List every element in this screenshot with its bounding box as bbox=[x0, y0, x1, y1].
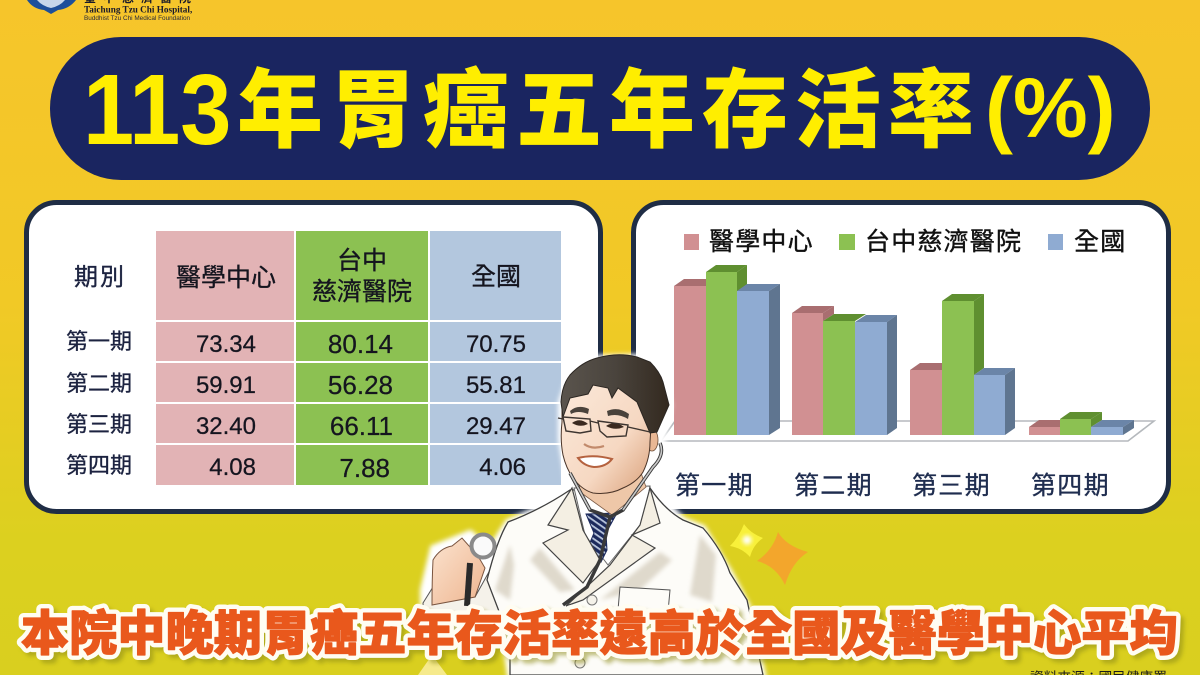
table column: 台中慈濟醫院: 66.11 bbox=[330, 411, 393, 441]
table row labels: 第二期 bbox=[66, 371, 132, 396]
doctor sleeve bbox=[423, 570, 512, 645]
chart legend: 醫學中心 bbox=[709, 228, 814, 256]
bars: 第一期 bbox=[674, 265, 780, 435]
title text: 年胃癌五年存活率 bbox=[237, 63, 981, 159]
bottom callout headline: 本院中晚期胃癌五年存活率遠高於全國及醫學中心平均 bbox=[21, 608, 1178, 661]
chart legend: 全國 bbox=[1074, 228, 1126, 256]
ear bbox=[646, 429, 658, 451]
table column: 全國 bbox=[430, 231, 561, 485]
mouth bbox=[578, 456, 612, 467]
bars: 第三期 bbox=[910, 294, 1015, 435]
panel: bar chart bbox=[634, 202, 1168, 512]
table row labels: 期別 bbox=[74, 264, 126, 291]
table column: 台中慈濟醫院: 慈濟醫院 bbox=[312, 278, 412, 306]
doctor coat bbox=[487, 488, 763, 675]
doctor white halo bbox=[423, 357, 763, 675]
hand bbox=[432, 538, 485, 605]
chart legend: 台中慈濟醫院 bbox=[865, 228, 1022, 256]
table column: 全國: 29.47 bbox=[466, 413, 526, 440]
table column: 醫學中心: 4.08 bbox=[209, 454, 256, 481]
panel: data table bbox=[26, 202, 600, 512]
chart category labels bbox=[675, 472, 1110, 500]
table column: 醫學中心: 73.34 bbox=[196, 331, 256, 358]
table column: 台中慈濟醫院: 80.14 bbox=[328, 329, 393, 359]
table column: 醫學中心: 醫學中心 bbox=[176, 264, 276, 292]
hospital logo: Buddhist Tzu Chi Medical Foundation bbox=[84, 15, 191, 22]
table column: 全國: 4.06 bbox=[479, 454, 526, 481]
table column: 台中慈濟醫院: 台中 bbox=[337, 247, 387, 275]
table column: 全國: 70.75 bbox=[466, 331, 526, 358]
chart category labels: 第四期 bbox=[1031, 472, 1110, 500]
right lapel bbox=[566, 488, 660, 606]
glasses bbox=[558, 417, 650, 437]
bottom callout headline: 本院中晚期胃癌五年存活率遠高於全國及醫學中心平均 bbox=[25, 612, 1182, 665]
coat button bbox=[587, 595, 597, 605]
neck bbox=[578, 470, 646, 515]
icon: orange sparkle bbox=[757, 532, 808, 585]
table column: 台中慈濟醫院 bbox=[296, 231, 428, 485]
stethoscope tubing bbox=[563, 443, 661, 605]
face bbox=[561, 382, 652, 493]
eyes bbox=[572, 420, 624, 429]
icon: yellow sparkle bbox=[730, 524, 763, 557]
table column: 醫學中心: 32.40 bbox=[196, 413, 256, 440]
hospital logo bbox=[27, 0, 198, 22]
necktie bbox=[586, 513, 617, 562]
chart category labels: 第二期 bbox=[794, 472, 873, 500]
table column: 台中慈濟醫院: 56.28 bbox=[328, 370, 393, 400]
table row labels: 第一期 bbox=[66, 329, 132, 354]
title banner bbox=[50, 37, 1150, 180]
shirt bbox=[574, 486, 650, 565]
bottom callout headline: 本院中晚期胃癌五年存活率遠高於全國及醫學中心平均 bbox=[21, 608, 1178, 661]
bars: 第二期 bbox=[792, 306, 897, 435]
coat shading bbox=[495, 535, 716, 602]
table column: 醫學中心 bbox=[156, 231, 294, 485]
table column: 台中慈濟醫院: 7.88 bbox=[339, 453, 390, 483]
table column: 全國: 55.81 bbox=[466, 372, 526, 399]
eyebrows bbox=[570, 407, 629, 419]
table row labels: 第四期 bbox=[66, 453, 132, 478]
table column: 醫學中心: 59.91 bbox=[196, 372, 256, 399]
table row labels bbox=[66, 264, 132, 478]
chart floor bbox=[661, 421, 1154, 441]
illustration: doctor bbox=[423, 355, 763, 675]
chart legend bbox=[684, 228, 1126, 256]
decorative star tip bbox=[418, 655, 447, 675]
title number: 113 bbox=[83, 54, 231, 166]
hospital logo: Taichung Tzu Chi Hospital, bbox=[84, 4, 192, 14]
stethoscope chestpiece bbox=[472, 534, 494, 558]
table column: 全國: 全國 bbox=[471, 263, 521, 291]
coat pocket bbox=[618, 587, 670, 612]
chart category labels: 第一期 bbox=[675, 472, 754, 500]
left lapel bbox=[543, 488, 600, 583]
nose bbox=[584, 444, 604, 448]
chart category labels: 第三期 bbox=[912, 472, 991, 500]
table row labels: 第三期 bbox=[66, 412, 132, 437]
hair bbox=[561, 355, 669, 433]
bars: 第四期 bbox=[1029, 412, 1134, 435]
title unit: (%) bbox=[985, 61, 1116, 155]
lower coat button bbox=[575, 658, 585, 668]
